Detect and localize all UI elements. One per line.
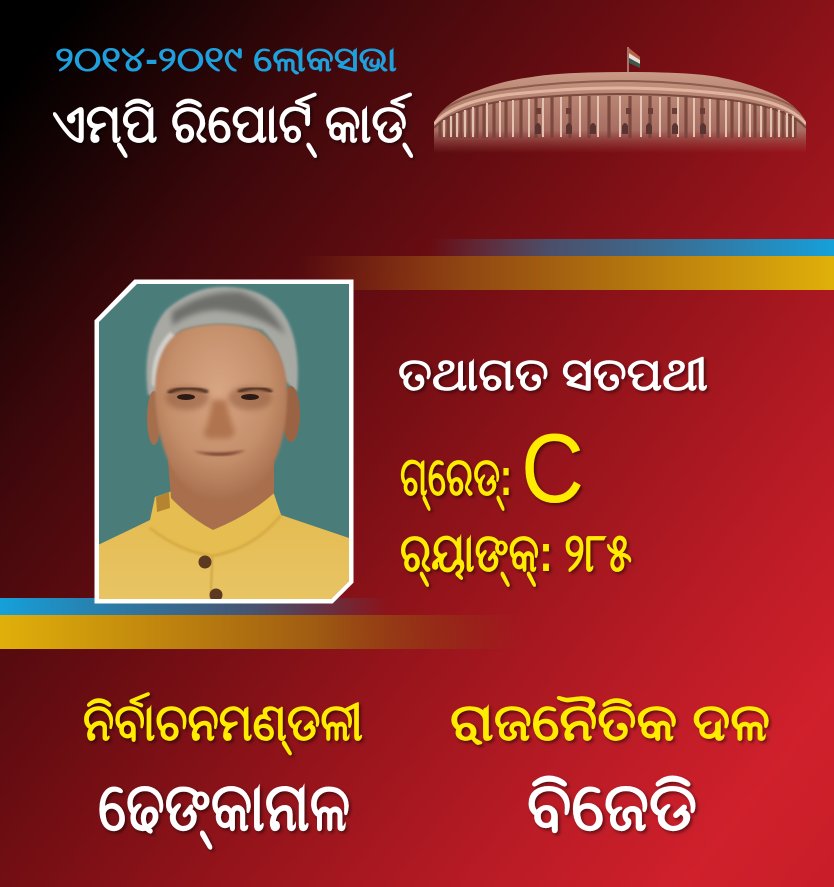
top blue ribbon [430, 239, 834, 256]
top gold ribbon [300, 256, 834, 290]
eye shadows [165, 386, 209, 410]
party label: ରାଜନୈତିକ ଦଳ [450, 694, 770, 752]
columns [444, 96, 793, 137]
collar [150, 494, 281, 556]
hair [146, 287, 298, 395]
eyes [177, 394, 195, 400]
bottom gold ribbon [0, 615, 525, 649]
portrait photo [99, 284, 349, 599]
ears [147, 391, 161, 445]
party name: ବିଜେଡି [527, 769, 697, 845]
icon: parliament building [434, 70, 806, 154]
brows [168, 388, 208, 393]
grade label: ଗ୍ରେଡ୍: [400, 447, 512, 511]
face [155, 324, 287, 502]
shirt [96, 491, 349, 602]
windows [535, 123, 706, 134]
placket [210, 556, 213, 602]
title: MP report card: ଏମ୍‌ପି ରିପୋର୍ଟ୍ କାର୍ଡ୍ [52, 92, 413, 158]
roof bands [434, 81, 806, 119]
photo frame [90, 275, 360, 610]
dark gaps [440, 96, 795, 138]
flag [628, 47, 640, 74]
neck [168, 455, 274, 530]
rank: ର‍୍ୟାଙ୍କ୍: ୨୮୫ [400, 523, 632, 587]
buttons [198, 556, 212, 568]
constituency name: ଢେଙ୍କାନାଳ [98, 769, 350, 851]
bottom blue ribbon [0, 598, 390, 615]
mouth [193, 450, 246, 456]
name: ତଥାଗତ ସତପଥୀ [398, 348, 708, 400]
grade value: C [521, 413, 584, 523]
nose [203, 400, 235, 439]
constituency label: ନିର୍ବାଚନମଣ୍ଡଳୀ [83, 692, 363, 755]
heading: Lok Sabha years: ୨୦୧୪-୨୦୧୯ ଲୋକସଭା [55, 40, 397, 79]
